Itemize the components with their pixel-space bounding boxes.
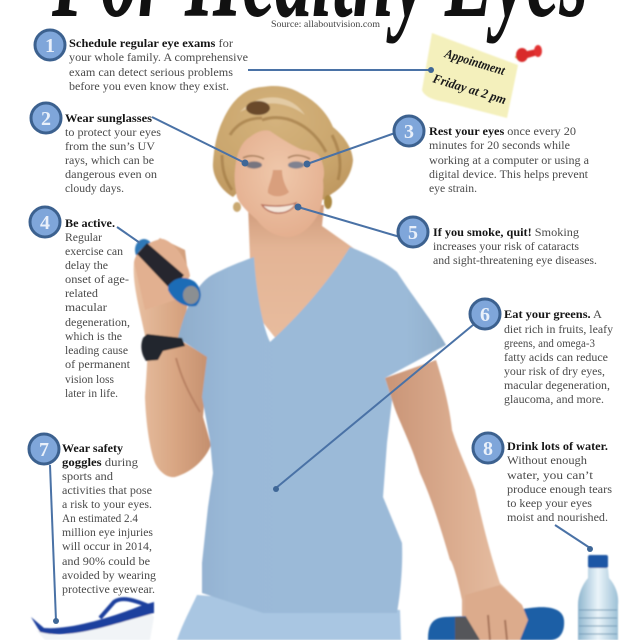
icon: water bottle — [578, 555, 618, 640]
tip 1: text: Schedule regular eye exams for — [69, 36, 233, 50]
tip 3: number badge: 3 — [404, 121, 414, 143]
tip 3: text: minutes for 20 seconds while — [429, 138, 570, 152]
tip 2: text: to protect your eyes — [65, 125, 161, 139]
tip 4: text: later in life. — [65, 386, 118, 400]
tip 8: text: water, you can’t — [507, 468, 594, 482]
earrings — [233, 202, 241, 212]
upper dumbbell cap — [135, 239, 153, 261]
tip 3: text: working at a computer or using a — [429, 153, 590, 167]
tip 6: text: macular degeneration, — [504, 378, 610, 392]
tip 7: text: and 90% could be — [62, 554, 150, 568]
icon: red pushpin — [515, 45, 542, 62]
tip 5: text: and sight-threatening eye diseases. — [433, 253, 597, 267]
tip 7: text: will occur in 2014, — [62, 539, 152, 553]
tip 6: text: diet rich in fruits, leafy — [504, 322, 613, 336]
tip 3: text: eye strain. — [429, 181, 477, 195]
tip 7: text: sports and — [62, 469, 113, 483]
tip 4: number badge: 4 — [40, 212, 50, 234]
dumbbell end — [183, 286, 199, 304]
tip 5: number badge: 5 — [408, 222, 418, 244]
tip 4: text: degeneration, — [65, 315, 130, 329]
neck and chest — [245, 205, 356, 350]
dumbbell blue — [168, 278, 201, 306]
strap — [137, 243, 184, 291]
tip 7: text — [62, 441, 156, 596]
tip 2: text: rays, which can be — [65, 153, 154, 167]
callout line 6 — [273, 325, 473, 492]
eyebrows — [243, 155, 310, 159]
tip 4: text: Be active. — [65, 216, 115, 230]
callout line 7 — [50, 465, 59, 624]
tip 3: text: digital device. This helps prevent — [429, 167, 589, 181]
icon: sticky note — [422, 33, 518, 118]
tip 4: text: macular — [65, 300, 107, 314]
icon: sticky note: Appointment — [442, 45, 507, 78]
tip 2: number badge: 2 — [41, 108, 51, 130]
tip 6: text: greens, and omega-3 — [504, 336, 595, 350]
hair dark patch — [246, 101, 270, 115]
forearm crease — [176, 358, 200, 412]
eyes — [246, 161, 262, 169]
tip 4: number badge — [30, 207, 60, 237]
tip 2: text: Wear sunglasses — [65, 111, 152, 125]
tip 3: text — [429, 124, 590, 195]
tip 8: text: produce enough tears — [507, 482, 612, 496]
tip 1: text: before you even know they exist. — [69, 79, 229, 93]
tip 4: text: related — [65, 286, 98, 300]
tip 4: text: vision loss — [65, 372, 114, 386]
tip 2: text — [65, 111, 161, 195]
tip 4: text: which is the — [65, 329, 122, 343]
tip 1: number badge: 1 — [45, 35, 55, 57]
tip 8: number badge: 8 — [483, 438, 493, 460]
hair streaks — [222, 118, 340, 190]
hand — [465, 585, 528, 640]
tip 6: number badge — [470, 299, 500, 329]
tip 7: number badge: 7 — [39, 439, 49, 461]
nose shadow — [268, 170, 289, 196]
pants — [177, 595, 401, 640]
tip 5: text — [433, 225, 597, 267]
tip 4: text: leading cause — [65, 343, 128, 357]
tip 8: text: Drink lots of water. — [507, 439, 608, 453]
icon: sticky note: Friday at 2 pm — [430, 70, 508, 107]
tip 6: text: glaucoma, and more. — [504, 392, 604, 406]
lower dumbbell — [428, 607, 564, 640]
face — [235, 130, 324, 237]
mouth — [262, 203, 296, 213]
tip 4: text: delay the — [65, 258, 108, 272]
tip 1: number badge — [35, 30, 65, 60]
tip 6: text — [504, 307, 613, 406]
tip 8: text — [507, 439, 612, 524]
callout line 3 — [304, 133, 395, 168]
tip 6: text: fatty acids can reduce — [504, 350, 608, 364]
tip 3: text: Rest your eyes once every 20 — [429, 124, 576, 138]
tip 4: text: onset of age- — [65, 272, 129, 286]
tip 4: text: of permanent — [65, 357, 131, 371]
tip 7: text: a risk to your eyes. — [62, 497, 152, 511]
tip 4: text: exercise can — [65, 244, 123, 258]
tip 3: number badge — [394, 116, 424, 146]
raised arm — [134, 238, 211, 477]
photo: woman with dumbbells — [134, 86, 564, 640]
callout line 1 — [248, 67, 434, 73]
tip 6: text: your risk of dry eyes, — [504, 364, 605, 378]
tip 5: text: increases your risk of cataracts — [433, 239, 579, 253]
tip 2: text: dangerous even on — [65, 167, 157, 181]
tip 8: text: to keep your eyes — [507, 496, 592, 510]
callout line 4 — [117, 227, 140, 243]
lower dumbbell grip — [455, 617, 485, 640]
tip 7: text: protective eyewear. — [62, 582, 155, 596]
hair highlight — [240, 97, 305, 115]
shirt — [178, 247, 446, 613]
tip 5: text: If you smoke, quit! Smoking — [433, 225, 579, 239]
tip 1: text: exam can detect serious problems — [69, 65, 233, 79]
tip 7: number badge — [29, 434, 59, 464]
fist — [134, 239, 190, 310]
tip 8: text: moist and nourished. — [507, 510, 608, 524]
tip 7: text: goggles during — [62, 455, 138, 469]
source line: Source: allaboutvision.com — [271, 20, 381, 30]
lowered arm — [385, 360, 528, 640]
tip 1: text: your whole family. A comprehensive — [69, 50, 248, 64]
tip 6: number badge: 6 — [480, 304, 490, 326]
tip 7: text: activities that pose — [62, 483, 152, 497]
tip 7: text: Wear safety — [62, 441, 123, 455]
callout line 8 — [555, 525, 593, 552]
tip 7: text: avoided by wearing — [62, 568, 156, 582]
hair — [213, 86, 353, 200]
tip 7: text: An estimated 2.4 — [62, 511, 138, 525]
tip 2: text: from the sun’s UV — [65, 139, 155, 153]
tip 7: text: million eye injuries — [62, 525, 153, 539]
tip 4: text: Regular — [65, 230, 102, 244]
tip 4: text — [65, 216, 131, 400]
tip 2: text: cloudy days. — [65, 181, 124, 195]
watch — [141, 334, 185, 361]
tip 8: text: Without enough — [507, 453, 587, 467]
callout line 2 — [152, 117, 248, 166]
tip 6: text: Eat your greens. A — [504, 307, 602, 321]
callout line 5 — [294, 204, 400, 237]
tip 1: text — [69, 36, 248, 93]
hand finger gaps — [488, 615, 507, 640]
icon: safety goggles — [31, 599, 154, 640]
tip 2: number badge — [31, 103, 61, 133]
tip 8: number badge — [473, 433, 503, 463]
tip 5: number badge — [398, 217, 428, 247]
